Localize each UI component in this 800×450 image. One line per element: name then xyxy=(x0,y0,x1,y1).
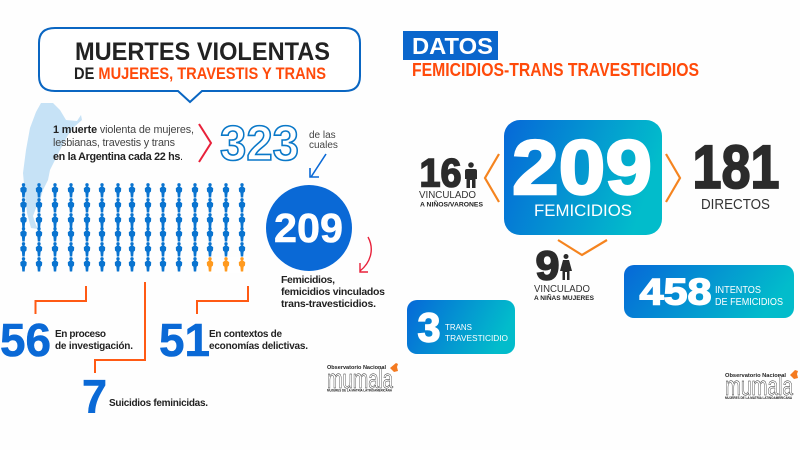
icon: bottom chevron xyxy=(558,240,607,255)
logo: mumalá right: MUJERES DE LA MATRIA LATINOAMERICANA xyxy=(725,396,793,400)
stat: 181 directos: 181 xyxy=(692,133,780,201)
text block: 1 muerte: lesbianas, travestis y trans xyxy=(53,137,176,149)
panel: 458 intentos de femicidios: INTENTOS xyxy=(715,285,761,296)
stat: 9 vinculado a niñas mujeres: VINCULADO xyxy=(534,284,590,295)
stat: 51: 51 xyxy=(159,314,210,366)
panel: 3 trans travesticidio: TRANS xyxy=(445,323,472,332)
icon: left chevron xyxy=(485,154,499,202)
stat: 16 vinculado a niños/varones: VINCULADO xyxy=(419,190,476,201)
icon: map of Argentina xyxy=(23,103,82,229)
panel: 209 femicidios xyxy=(504,120,662,235)
stat: 7: Suicidios feminicidas. xyxy=(109,398,208,409)
stat: 16 vinculado a niños/varones: 16 xyxy=(420,152,462,196)
stat: 51: economías delictivas. xyxy=(209,341,308,352)
stat: 51 xyxy=(159,314,308,366)
logo: mumalá right: Observatorio Nacional xyxy=(725,373,787,379)
panel: 3 trans travesticidio: 3 xyxy=(418,304,440,350)
heading: muertes violentas: MUERTES VIOLENTAS xyxy=(75,38,330,66)
panel: 3 trans travesticidio: TRAVESTICIDIO xyxy=(445,334,508,343)
connector: 51 xyxy=(197,286,248,314)
title speech bubble xyxy=(39,28,360,102)
panel: 458 intentos de femicidios: DE FEMICIDIOS xyxy=(715,297,783,308)
text block: 1 muerte: 1 muerte violenta de mujeres, xyxy=(53,124,194,136)
stat: 9 vinculado a niñas mujeres: A NIÑAS MUJERES xyxy=(534,293,594,302)
text: femicidios: trans-travesticidios. xyxy=(281,298,376,310)
icon: red chevron xyxy=(199,124,211,162)
stat: 56: En proceso xyxy=(55,329,106,340)
stat: 9 vinculado a niñas mujeres xyxy=(534,242,594,302)
stat: 51: En contextos de xyxy=(209,329,282,340)
arrow: red curved xyxy=(360,237,371,272)
stat: 56: de investigación. xyxy=(55,341,133,352)
stat: 56: 56 xyxy=(0,314,51,366)
text: femicidios: Femicidios, xyxy=(281,274,335,286)
stat: 16 vinculado a niños/varones xyxy=(419,152,483,208)
icon: right chevron xyxy=(666,154,680,202)
stat: 181 directos: DIRECTOS xyxy=(701,197,770,213)
stat: 7: 7 xyxy=(82,370,107,423)
icon: woman xyxy=(560,254,572,280)
text: de las cuales: cuales xyxy=(309,140,338,151)
text: femicidios: femicidios vinculados xyxy=(281,286,385,298)
icon: man xyxy=(465,162,477,188)
logo: mumalá left: Observatorio Nacional xyxy=(327,365,387,371)
circle: 209: 209 xyxy=(274,205,343,251)
circle: 209 xyxy=(266,185,352,271)
heading: femicidios-trans travesticidios: FEMICIDIOS-TRANS TRAVESTICIDIOS xyxy=(412,60,699,80)
number: 323: 323 xyxy=(220,117,299,171)
text block: 1 muerte: en la Argentina cada 22 hs. xyxy=(53,151,183,163)
connector: 56 xyxy=(36,286,86,314)
stat: 7 xyxy=(82,370,208,423)
arrow: to 209 xyxy=(310,154,326,177)
text: de las cuales: de las xyxy=(309,130,336,141)
panel: 458 intentos de femicidios xyxy=(624,265,794,318)
panel: 458 intentos de femicidios: 458 xyxy=(640,272,712,312)
panel: 209 femicidios: 209 xyxy=(512,125,652,211)
panel: 209 femicidios: FEMICIDIOS xyxy=(534,201,632,220)
connector: 7 xyxy=(95,282,145,373)
stat: 9 vinculado a niñas mujeres: 9 xyxy=(536,242,560,288)
panel: 3 trans travesticidio xyxy=(407,300,515,354)
logo: mumalá left: mumala xyxy=(327,364,394,394)
heading: de mujeres, travestis y trans: DE MUJERES, TRAVESTIS Y TRANS xyxy=(74,64,326,83)
chart: person pictogram xyxy=(20,183,247,273)
heading: datos: DATOS xyxy=(412,33,493,59)
stat: 16 vinculado a niños/varones: A NIÑOS/VARONES xyxy=(420,200,483,208)
stat: 56 xyxy=(0,314,133,366)
logo: mumalá left: MUJERES DE LA MATRIA LATINOAMERICANA xyxy=(327,388,393,392)
